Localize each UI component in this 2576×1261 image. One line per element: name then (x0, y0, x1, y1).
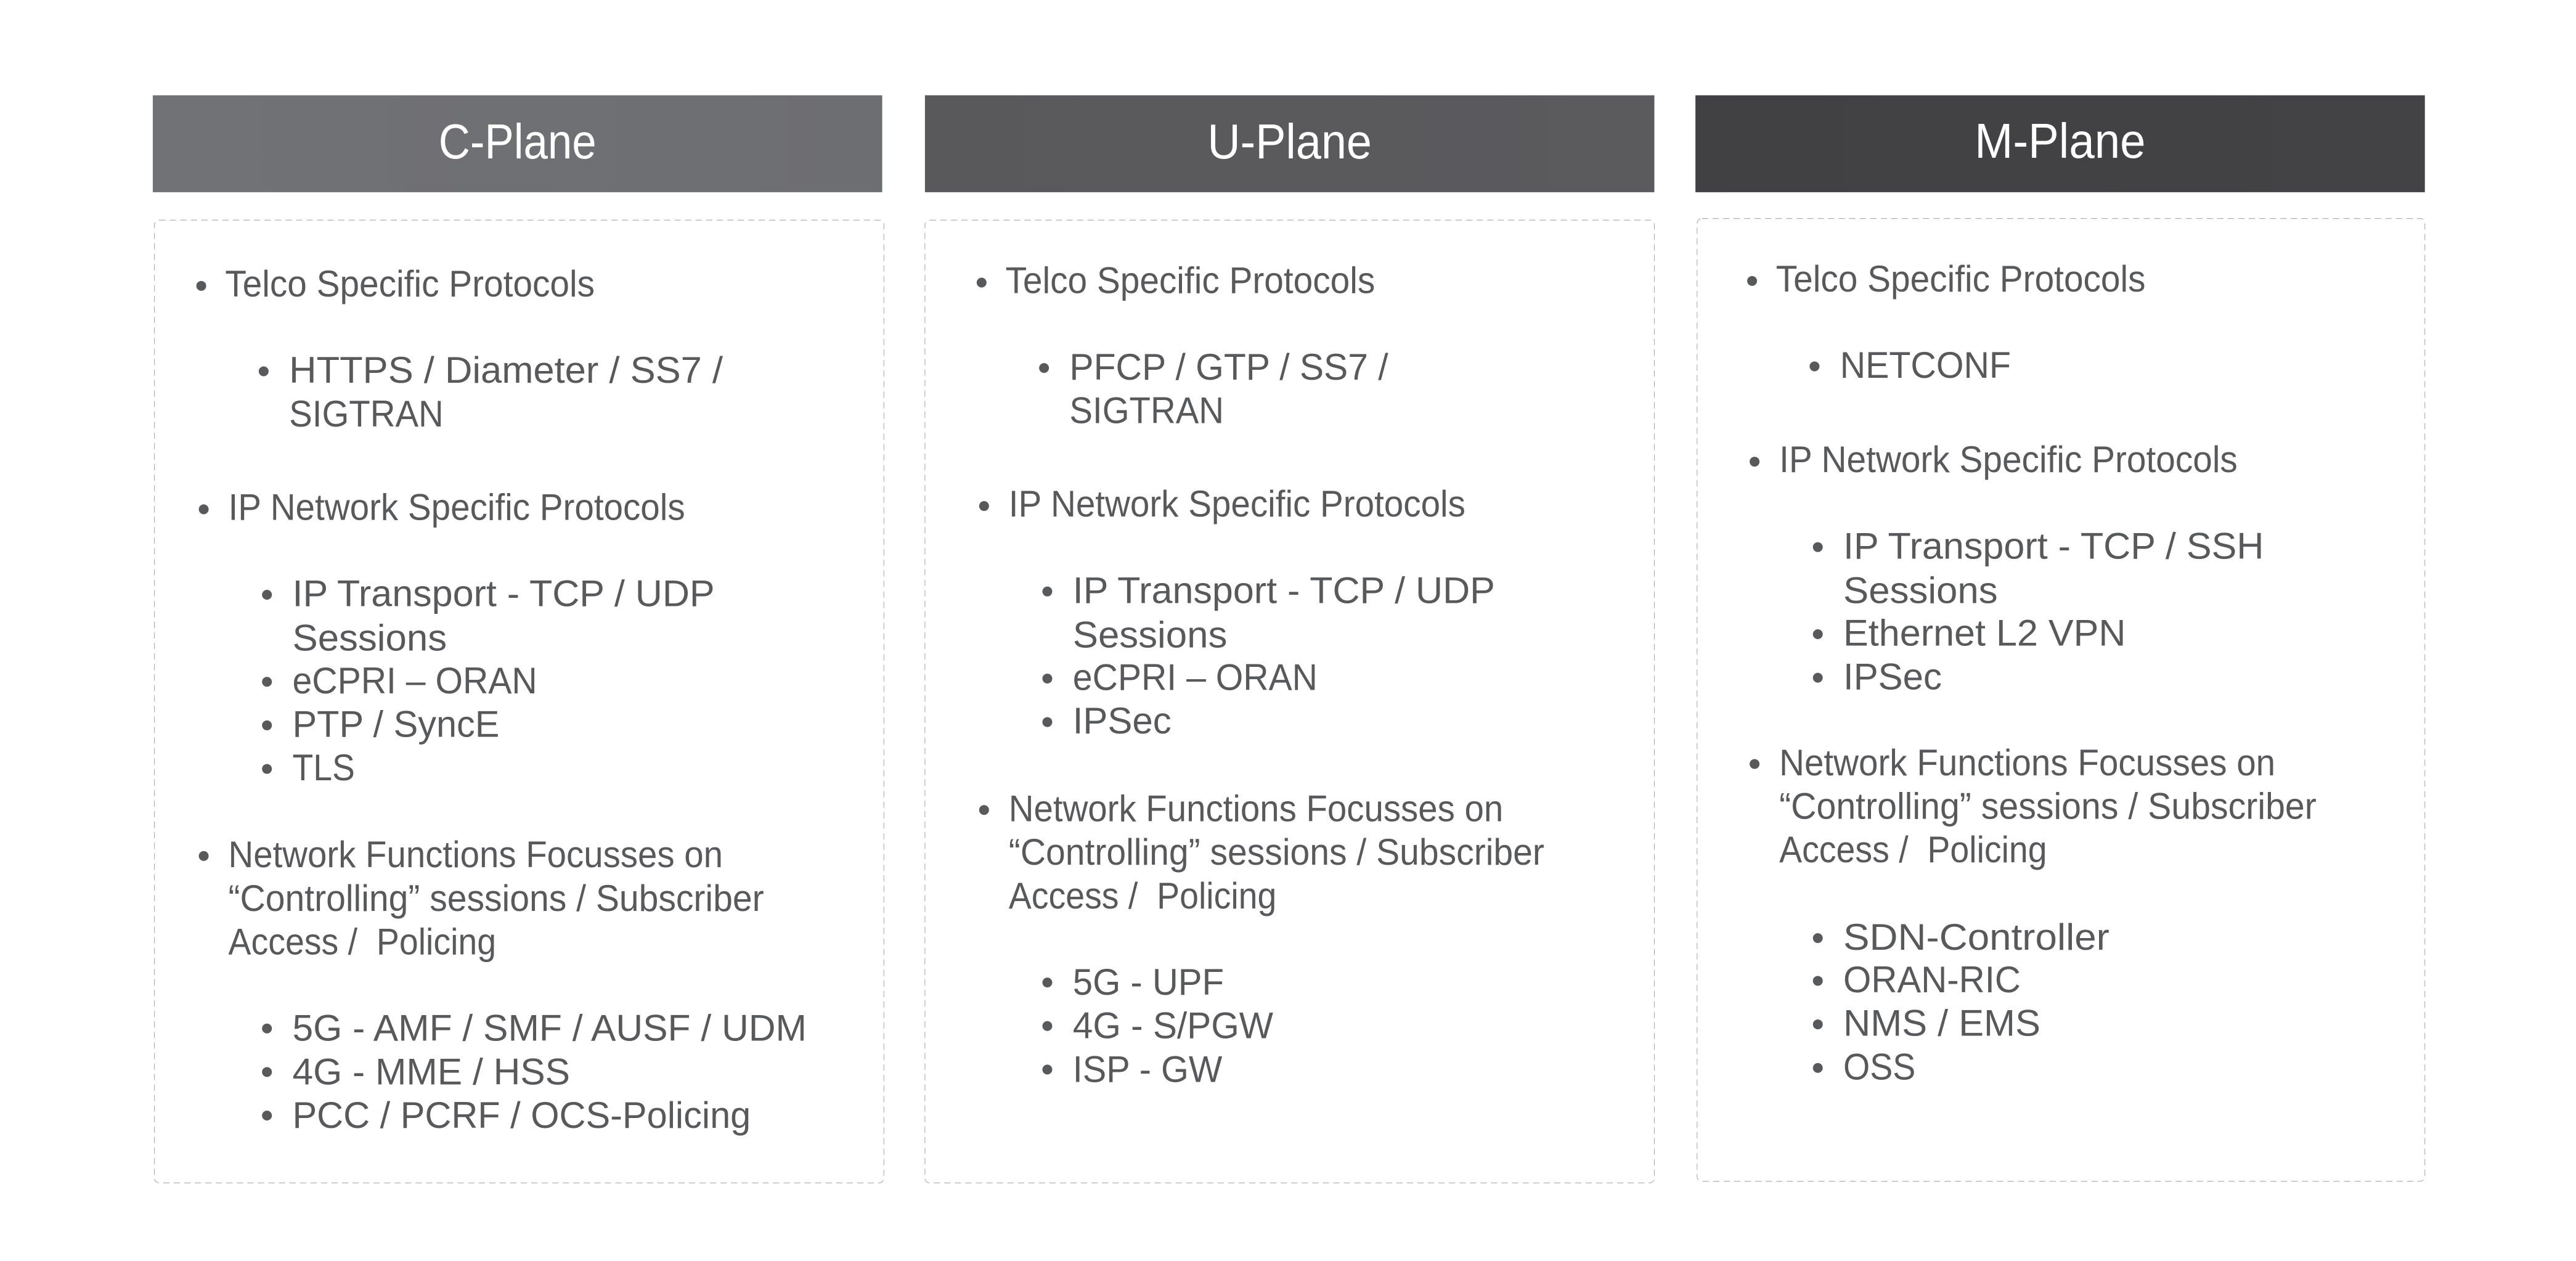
text block: telco specific protocols: Telco Specific Protocols (1776, 258, 2146, 300)
text block: telco specific protocols: SIGTRAN (1069, 389, 1224, 431)
column: C-Plane (153, 96, 884, 1183)
text block: IP network specific protocols: IP Network Specific Protocols (1779, 438, 2238, 480)
text block: IP network specific protocols (1750, 438, 2264, 697)
text block: IP network specific protocols: IP Transport - TCP / SSH (1843, 524, 2264, 566)
text block: network functions: SDN-Controller (1843, 916, 2109, 958)
text block: network functions: 4G - S/PGW (1073, 1005, 1273, 1047)
text block: network functions: PCC / PCRF / OCS-Policing (293, 1094, 751, 1136)
text block: IP network specific protocols: IP Network Specific Protocols (229, 486, 685, 528)
text block: IP network specific protocols: Sessions (1073, 613, 1227, 655)
text block: network functions: Network Functions Focusses on (229, 833, 723, 875)
text block: network functions: 4G - MME / HSS (293, 1050, 570, 1092)
text block: network functions: 5G - UPF (1073, 961, 1224, 1003)
heading: M-Plane (1695, 96, 2425, 192)
text block: network functions: Access / Policing (1779, 828, 2047, 870)
text block: telco specific protocols (977, 259, 1388, 431)
text block: IP network specific protocols: eCPRI – ORAN (293, 659, 537, 701)
text block: IP network specific protocols: IPSec (1843, 655, 1942, 697)
text block: network functions: “Controlling” sessions / Subscriber (1779, 785, 2317, 827)
text block: IP network specific protocols: Ethernet L2 VPN (1843, 612, 2126, 654)
text block: IP network specific protocols: IP Transport - TCP / UDP (1073, 569, 1495, 611)
text block: IP network specific protocols: Sessions (293, 617, 447, 659)
text block: IP network specific protocols (979, 483, 1495, 741)
column: M-Plane (1695, 96, 2425, 1181)
text block: IP network specific protocols: TLS (293, 746, 355, 788)
heading: U-Plane (925, 96, 1654, 192)
text block: network functions (1750, 741, 2317, 1087)
text block: IP network specific protocols: IP Transport - TCP / UDP (293, 573, 715, 614)
text block: network functions: Network Functions Focusses on (1009, 788, 1503, 830)
panel: C-Plane protocol list (155, 220, 884, 1183)
column: U-Plane (925, 96, 1654, 1183)
text block: IP network specific protocols: IP Network Specific Protocols (1009, 483, 1465, 524)
heading: U-Plane: U-Plane (1207, 114, 1372, 169)
text block: network functions: Network Functions Focusses on (1779, 741, 2275, 783)
text block: IP network specific protocols (199, 486, 715, 788)
text block: telco specific protocols: Telco Specific Protocols (225, 263, 595, 304)
text block: network functions: Access / Policing (229, 921, 496, 963)
text block: network functions: ISP - GW (1073, 1048, 1222, 1090)
text block: telco specific protocols: SIGTRAN (289, 393, 444, 435)
text block: network functions: NMS / EMS (1843, 1002, 2040, 1044)
panel: U-Plane protocol list (925, 220, 1654, 1183)
text block: telco specific protocols: NETCONF (1840, 344, 2011, 386)
text block: network functions: 5G - AMF / SMF / AUSF / UDM (293, 1007, 807, 1049)
text block: IP network specific protocols: PTP / SyncE (293, 703, 499, 745)
heading: C-Plane: C-Plane (439, 114, 597, 169)
text block: network functions: “Controlling” sessions / Subscriber (1009, 831, 1544, 873)
text block: IP network specific protocols: IPSec (1073, 700, 1172, 741)
panel: M-Plane protocol list (1697, 219, 2425, 1181)
text block: network functions: OSS (1843, 1045, 1915, 1087)
text block: IP network specific protocols: eCPRI – ORAN (1073, 656, 1318, 698)
text block: IP network specific protocols: Sessions (1843, 569, 1998, 611)
heading: M-Plane: M-Plane (1975, 113, 2146, 168)
heading: C-Plane (153, 96, 882, 192)
text block: network functions (979, 788, 1544, 1090)
text block: telco specific protocols: PFCP / GTP / SS7 / (1069, 346, 1388, 388)
text block: network functions: “Controlling” sessions / Subscriber (229, 877, 764, 919)
text block: network functions: ORAN-RIC (1843, 958, 2021, 1000)
text block: telco specific protocols: HTTPS / Diameter / SS7 / (289, 349, 723, 391)
text block: network functions: Access / Policing (1009, 875, 1276, 916)
text block: telco specific protocols (197, 263, 723, 435)
text block: network functions (199, 833, 807, 1136)
text block: telco specific protocols (1747, 258, 2146, 386)
text block: telco specific protocols: Telco Specific Protocols (1005, 259, 1375, 301)
